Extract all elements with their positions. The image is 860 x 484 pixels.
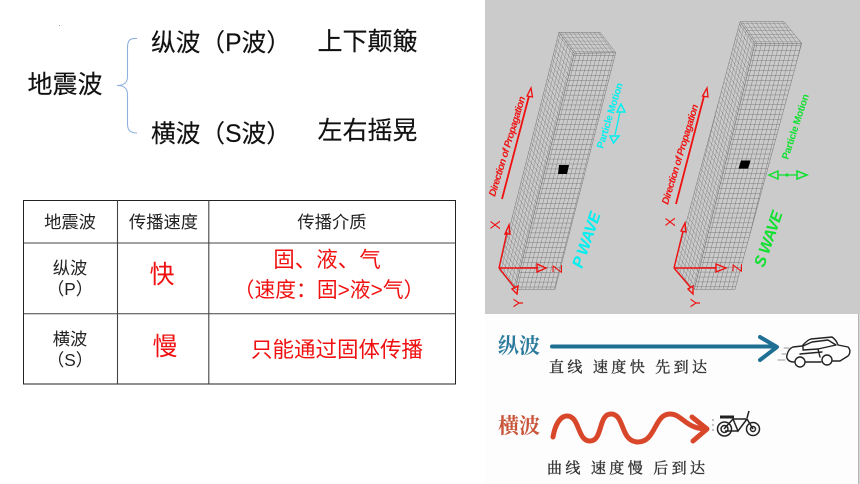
label: S WAVE: S WAVE (752, 208, 787, 269)
S wave axes (662, 217, 745, 308)
comparison table: 横波 (53, 329, 87, 349)
comparison table: （P） (47, 279, 93, 299)
comparison table: 固、液、气 (273, 248, 381, 272)
panel: wave comparison illustration (485, 314, 860, 484)
arrow: straight wave (552, 337, 777, 360)
S wave particle motion (769, 93, 812, 179)
P wave axes: X (487, 220, 503, 230)
comparison table: （速度：固>液>气） (234, 279, 424, 302)
P wave axes: Z (549, 264, 565, 273)
heading: 地震波: 地震波 (28, 71, 103, 99)
S wave axes: Z (729, 263, 745, 272)
speck (59, 25, 60, 26)
comparison table: 纵波 (53, 258, 87, 278)
branch: 纵波: 上下颠簸 (318, 28, 418, 56)
caption: 纵波: 直线 速度快 先到达 (549, 358, 707, 376)
comparison table: 传播介质 (297, 212, 367, 232)
S wave axes: Y (687, 298, 703, 308)
branch: 横波 (151, 117, 418, 148)
S wave axes: X (662, 217, 678, 227)
P wave axes (487, 220, 565, 308)
arrow: sine wave (553, 414, 707, 442)
P wave block (499, 32, 616, 289)
S wave block (674, 22, 802, 289)
label: P WAVE: P WAVE (570, 209, 605, 270)
comparison table: 慢 (152, 333, 178, 361)
branch: 横波: 横波（S波） (151, 120, 291, 148)
comparison table: 地震波 (44, 212, 96, 232)
branch: 纵波 (151, 28, 418, 57)
panel: wave block diagrams (485, 0, 860, 314)
label: 纵波: 纵波 (498, 334, 540, 358)
comparison table: 传播速度 (129, 212, 198, 232)
comparison table: 只能通过固体传播 (251, 338, 423, 362)
comparison table: 快 (149, 261, 175, 289)
bracket (117, 38, 137, 133)
icon: bicycle (713, 411, 760, 436)
S wave particle motion: Particle Motion (780, 93, 812, 161)
P wave axes: Y (510, 298, 526, 308)
S wave propagation arrow: Direction of Propagation (660, 103, 701, 206)
caption: 横波: 曲线 速度慢 后到达 (547, 459, 705, 477)
P wave particle motion: Particle Motion (595, 82, 626, 150)
P wave propagation arrow: Direction of Propagation (487, 95, 528, 198)
comparison table: （S） (47, 350, 93, 370)
label: 横波: 横波 (498, 414, 540, 438)
branch: 横波: 左右摇晃 (318, 117, 418, 145)
branch: 纵波: 纵波（P波） (151, 29, 291, 57)
icon: car (778, 337, 850, 367)
comparison table (24, 200, 456, 384)
